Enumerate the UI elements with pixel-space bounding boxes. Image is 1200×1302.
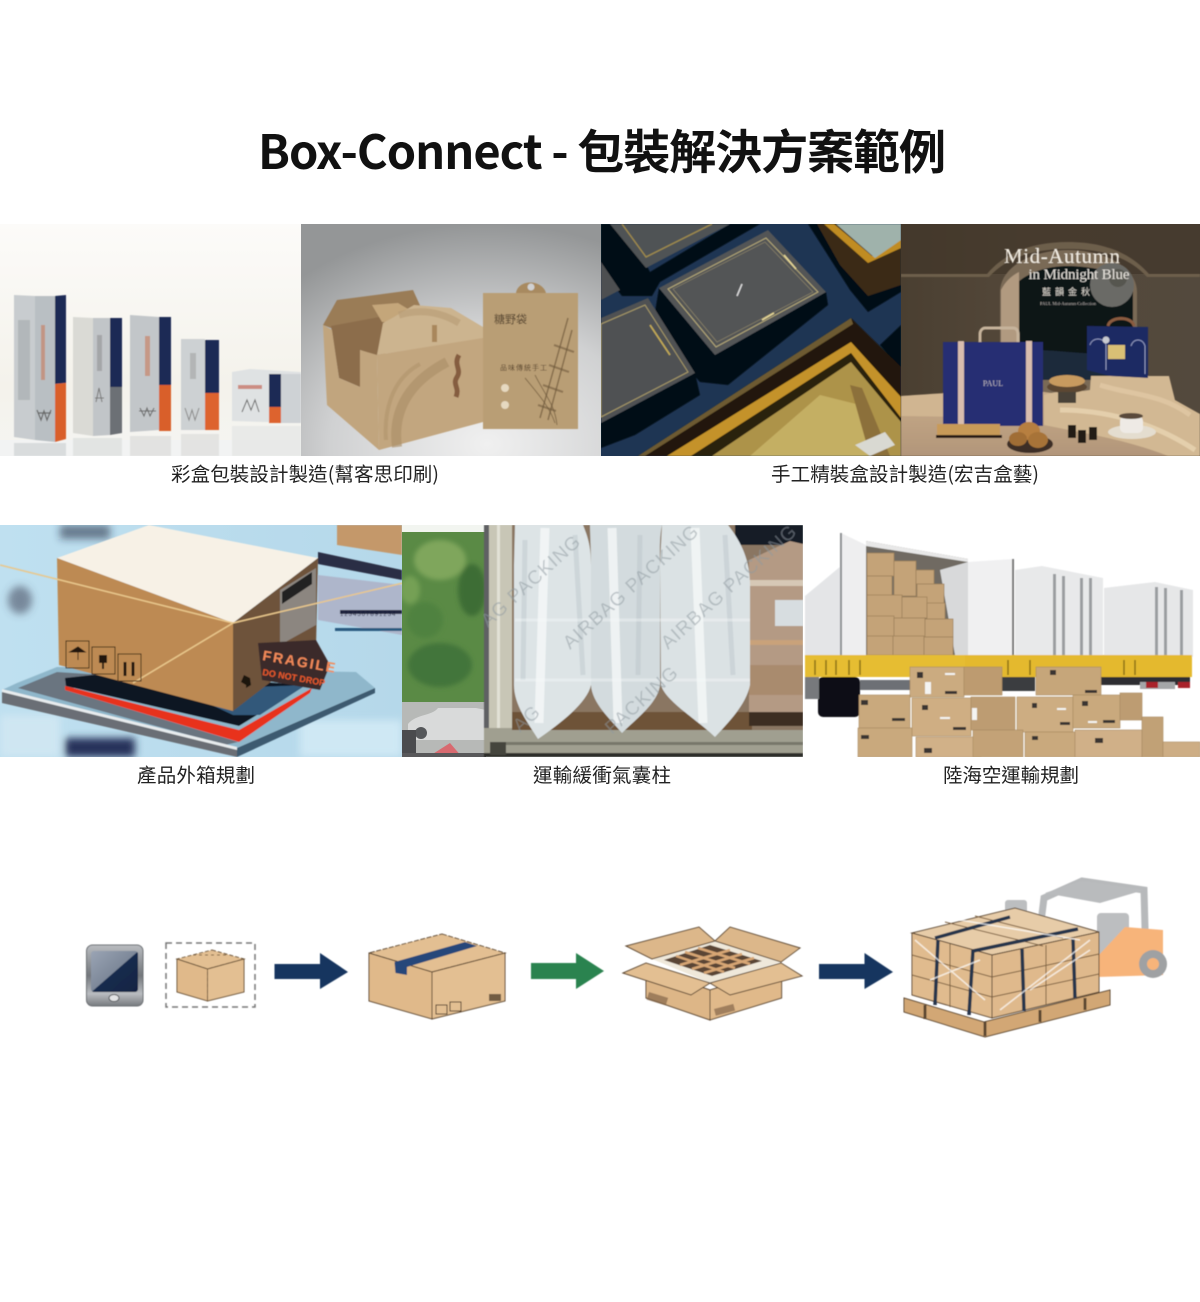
yellow truck beds: [805, 655, 1192, 677]
poster headline: 藍韻金秋: [1042, 285, 1094, 298]
shipping carton: [0, 525, 403, 711]
poster headline: in Midnight Blue: [1028, 267, 1130, 283]
icon: forklift: [1005, 881, 1167, 978]
box: tall navy and orange carton: [14, 295, 66, 456]
shadows under boxes: [601, 224, 901, 448]
icon: sealed carton: [369, 934, 505, 1019]
grey box with gold border: left: [601, 298, 695, 423]
watermark text: AIRBAG PACKING: [657, 521, 802, 654]
box: grey and navy carton: [73, 317, 122, 456]
grey box with gold border: centre: [659, 230, 826, 355]
poster headline: Mid-Autumn: [1004, 244, 1120, 268]
photo: trucks and cartons: [803, 525, 1200, 757]
poster headline: [1004, 244, 1130, 306]
pastries and tea set: [936, 375, 1156, 453]
photo: outer carton planning: [0, 525, 403, 757]
blue briefcase gift box: PAUL: [983, 379, 1003, 388]
watermark text: AG PACKING: [477, 531, 586, 632]
watermark text: [477, 521, 802, 739]
carton stack in foreground: [858, 667, 1200, 757]
kraft hanging card: [483, 282, 578, 429]
box: navy and orange carton: [130, 315, 171, 456]
fragile label: DO NOT DROP: [262, 667, 326, 688]
trees and parked car: [400, 525, 486, 757]
watermark text: AIRBAG PACKING: [559, 521, 704, 654]
watermark text: AG: [509, 701, 545, 737]
kraft carrying box: [323, 290, 483, 450]
scanning platform: [2, 667, 375, 757]
photo: colour retail boxes: [0, 248, 301, 456]
photo: kraft paper box and card: [301, 224, 601, 456]
air cushion columns: [514, 525, 750, 739]
arrow: navy: [274, 953, 348, 989]
background carton and screen: 1234567891234: [340, 612, 396, 618]
kraft hanging card: 糖野袋: [494, 311, 527, 327]
arrow: green: [531, 953, 604, 989]
truck trailers: [805, 533, 1193, 657]
gold framed painting bottom right: [638, 318, 901, 456]
caption: air cushion columns: 運輸緩衝氣囊柱: [533, 759, 671, 788]
arch with night sky: [901, 242, 1200, 400]
stacked pallet cargo: [749, 541, 803, 726]
icon: wrapped pallet: [904, 908, 1110, 1037]
caption: handmade boxes: 手工精裝盒設計製造(宏吉盒藝): [771, 458, 1039, 487]
wheels and undercarriage: [805, 677, 1190, 717]
caption: land sea air transport: 陸海空運輸規劃: [943, 759, 1079, 788]
photo: transport air cushion columns: [400, 521, 803, 757]
watermark text: PACKING: [601, 662, 683, 739]
blue gift bag with arches: [1087, 318, 1148, 378]
carton labels: [861, 670, 1115, 753]
icon: product in dashed outline: [166, 943, 255, 1007]
arrow: navy: [819, 953, 893, 989]
floor and draped cloth: [901, 376, 1200, 456]
photo: mid-autumn gift set: [901, 224, 1200, 456]
box: small navy and orange carton: [181, 339, 219, 456]
container door post: [484, 525, 803, 757]
caption: colour boxes: 彩盒包裝設計製造(幫客思印刷): [171, 458, 439, 487]
icon: open carton with cushioning: [623, 927, 802, 1020]
photo: handmade gift boxes with gold frames: [601, 224, 901, 456]
cartons inside trailer: [867, 553, 953, 655]
gold framed painting top right: [817, 224, 901, 296]
fragile label: [258, 640, 339, 690]
dark container interior: [512, 525, 803, 730]
caption: outer carton planning: 產品外箱規劃: [137, 759, 255, 788]
poster headline: PAUL Mid-Autumn Collection: [1040, 301, 1097, 306]
background carton and screen: [318, 525, 402, 635]
box: low wide carton: [232, 369, 301, 456]
fragile label: FRAGILE: [261, 647, 339, 676]
blue briefcase gift box: [943, 328, 1043, 428]
title: Box-Connect - 包裝解決方案範例: [258, 114, 946, 183]
process diagram: [86, 881, 1167, 1037]
grey box with gold border: top left: [601, 224, 730, 300]
icon: tablet: [86, 945, 143, 1006]
kraft hanging card: 品味傳統手工: [500, 363, 548, 373]
